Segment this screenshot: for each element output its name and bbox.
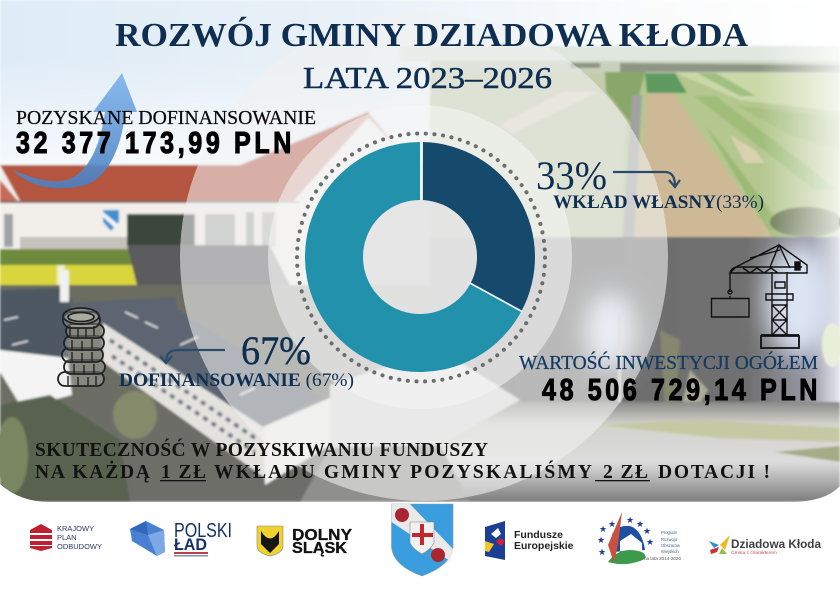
logo: Krajowy Plan Odbudowy: ODBUDOWY: [57, 542, 102, 551]
logo: PROW rural development programme: Rozwoju: [661, 537, 678, 542]
callout: 33%: [536, 153, 764, 213]
segment gaps: [422, 142, 522, 312]
crane base: [761, 335, 799, 348]
effectiveness statement: SKUTECZNOŚĆ W POZYSKIWANIU FUNDUSZY: [35, 439, 488, 461]
logo: Fundusze Europejskie: Fundusze: [514, 529, 563, 541]
logo: Polski Ład: [130, 520, 232, 556]
segment: 67% funding: [305, 142, 522, 372]
logo: Dolny Śląsk: [257, 526, 352, 557]
logo: Polski Ład: POLSKI: [174, 520, 232, 542]
logo: municipal coat of arms: [392, 504, 453, 576]
logo: PROW rural development programme: Program: [661, 530, 678, 535]
value: 33%: 33%: [536, 153, 607, 198]
logo: Fundusze Europejskie: Europejskie: [514, 540, 574, 552]
effectiveness statement: WKŁADU GMINY POZYSKALIŚMY: [214, 461, 592, 483]
segment: 33% own contribution: [422, 142, 535, 311]
logo: PROW rural development programme: Wiejskich: [661, 549, 679, 554]
title: LATA 2023–2026: [303, 60, 552, 95]
logo: PROW rural development programme: [597, 512, 681, 564]
logo: Krajowy Plan Odbudowy: [30, 524, 102, 551]
logo: PROW rural development programme: ★: [608, 519, 616, 529]
logo: PROW rural development programme: ★: [599, 524, 607, 534]
logo: Dolny Śląsk: ŚLĄSK: [292, 538, 347, 557]
logo: Dziadowa Kłoda: Gmina z charakterem: [731, 550, 777, 556]
logo: PROW rural development programme: ★: [598, 547, 606, 557]
logo: Krajowy Plan Odbudowy: PLAN: [57, 533, 77, 542]
logo: Dziadowa Kłoda: Dziadowa Kłoda: [731, 539, 822, 551]
value: 67%: 67%: [241, 328, 311, 373]
label: funding: DOFINANSOWANIE (67%): [119, 370, 354, 391]
label: total investment: WARTOŚĆ INWESTYCJI OGÓŁEM: [519, 350, 818, 374]
logo: Polski Ład: ŁAD: [174, 535, 207, 554]
icon: blue growth arrow: [13, 73, 137, 188]
logo: Krajowy Plan Odbudowy: KRAJOWY: [57, 524, 94, 533]
dotted ring: [297, 134, 545, 382]
effectiveness statement: 2 ZŁ: [603, 462, 648, 483]
logo: Fundusze Europejskie: [485, 521, 574, 560]
logo: PROW rural development programme: ★: [646, 537, 654, 547]
crane load: [712, 296, 749, 317]
photo: night road: [420, 237, 840, 502]
logo: PROW rural development programme: ★: [636, 519, 644, 529]
photo: community building: [0, 112, 430, 290]
title: [115, 16, 748, 95]
donut hole tint: [362, 199, 478, 315]
crane tower: [766, 272, 793, 335]
effectiveness statement: [35, 439, 770, 483]
donut chart: [297, 134, 545, 382]
crane jib: [730, 245, 807, 292]
arrow: to own contribution: [613, 172, 680, 187]
callout: 67%: [119, 328, 354, 391]
label: obtained funding: POZYSKANE DOFINANSOWANIE: [16, 107, 316, 129]
obtained funding block: [16, 107, 316, 160]
translucent inner circle: [268, 105, 572, 409]
label: own contribution: WKŁAD WŁASNY(33%): [553, 192, 764, 213]
logo: PROW rural development programme: na lata 2014-2020: [644, 556, 681, 561]
effectiveness statement: 1 ZŁ: [161, 462, 206, 483]
total investment block: [519, 350, 821, 407]
logo: Dziadowa Kłoda: [709, 535, 822, 556]
translucent large circle: [180, 13, 668, 501]
arrow: to funding: [160, 350, 225, 363]
logo: PROW rural development programme: ★: [643, 526, 651, 536]
effectiveness statement: NA KAŻDĄ: [35, 462, 150, 483]
title: ROZWÓJ GMINY DZIADOWA KŁODA: [115, 16, 748, 54]
icon: crane: [712, 245, 807, 348]
photo: school aerial: [0, 270, 520, 502]
effectiveness statement: DOTACJI !: [658, 462, 770, 483]
photo: sky: [0, 0, 585, 164]
logo: PROW rural development programme: Obszarów: [661, 543, 681, 548]
logo: PROW rural development programme: ★: [626, 515, 634, 525]
logo: Dolny Śląsk: DOLNY: [292, 527, 352, 544]
photo: farm fields: [400, 46, 840, 238]
amount: obtained funding: 32 377 173,99 PLN: [16, 125, 295, 160]
logo: PROW rural development programme: ★: [597, 535, 605, 545]
icon: coin stack: [58, 308, 105, 386]
